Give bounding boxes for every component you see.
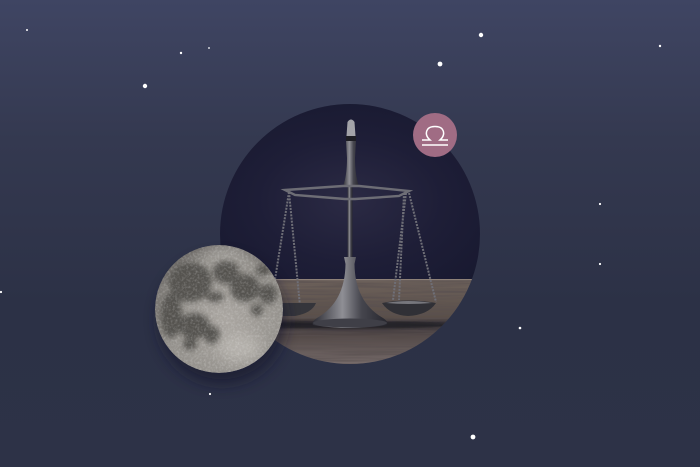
left pan [282, 303, 316, 316]
left chains [273, 192, 300, 306]
libra badge [413, 113, 457, 157]
lunar maria [160, 260, 277, 350]
moon shadow [158, 256, 286, 384]
column [348, 186, 352, 258]
libra glyph [422, 126, 448, 145]
surface speckle [155, 245, 283, 373]
bright highlands [203, 247, 262, 362]
ring and column top [346, 120, 356, 136]
balance scale [270, 120, 436, 328]
base [312, 257, 388, 328]
wooden table [275, 279, 472, 364]
dark wall [220, 104, 480, 280]
right pan [382, 300, 436, 316]
full moon [155, 245, 283, 373]
beam [285, 186, 409, 199]
right chains [393, 193, 436, 302]
photo disc: scales on table [220, 104, 480, 364]
